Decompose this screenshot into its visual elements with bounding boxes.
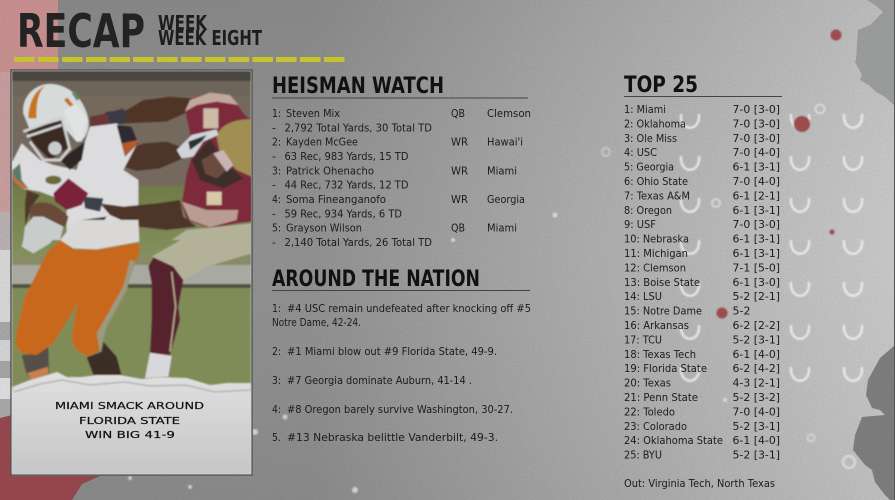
entry 4: Georgia: [487, 194, 525, 206]
Top 25 rankings table: 9: USF: [624, 219, 656, 231]
Top 25 rankings table: 23: Colorado: [624, 421, 687, 433]
Top 25 rankings table: 5-2 [3-2]: [732, 392, 780, 404]
entry 4: -: [272, 208, 276, 220]
Top 25 rankings table: 4-3 [2-1]: [732, 378, 780, 390]
Top 25 rankings table: 8: Oregon: [624, 205, 672, 217]
entry 3: Patrick Ohenacho: [286, 165, 374, 177]
entry 3: WR: [451, 165, 468, 177]
heading: Heisman Watch: HEISMAN WATCH: [272, 74, 444, 99]
Top 25 rankings table: 3: Ole Miss: [624, 133, 677, 145]
Top 25 rankings table: 21: Penn State: [624, 392, 698, 404]
entry 2: [272, 137, 523, 163]
item 1: [272, 303, 531, 329]
Top 25 rankings table: 5-2: [732, 306, 750, 318]
Top 25 rankings table: 24: Oklahoma State: [624, 435, 723, 447]
Top 25 rankings table: 7-1 [5-0]: [732, 262, 780, 274]
photo: football players: [12, 71, 252, 391]
panel: photo card: [11, 70, 252, 475]
Top 25 rankings table: 18: Texas Tech: [624, 349, 696, 361]
entry 1: -: [272, 122, 276, 134]
entry 1: 1:: [272, 108, 281, 120]
item 3: #7 Georgia dominate Auburn, 41-14 .: [287, 375, 472, 387]
Top 25 rankings table: 7: Texas A&M: [624, 190, 690, 202]
entry 2: Kayden McGee: [286, 137, 358, 149]
entry 5: Miami: [487, 223, 517, 235]
subtitle: week eight: WEEK EIGHT: [158, 26, 262, 50]
Top 25 rankings table: 6-1 [3-1]: [732, 234, 780, 246]
entry 3: Miami: [487, 165, 517, 177]
Around the Nation list: [272, 303, 531, 444]
caption line 1: MIAMI SMACK AROUND: [55, 401, 204, 412]
Top 25 rankings table: 6-1 [4-0]: [732, 349, 780, 361]
entry 2: 63 Rec, 983 Yards, 15 TD: [284, 151, 408, 163]
Top 25 rankings table: 5: Georgia: [624, 162, 674, 174]
item 4: 4:: [272, 404, 281, 416]
Top 25 rankings table: 2: Oklahoma: [624, 118, 686, 130]
entry 1: 2,792 Total Yards, 30 Total TD: [284, 122, 432, 134]
entry 2: 2:: [272, 137, 281, 149]
Top 25 rankings table: 7-0 [4-0]: [732, 176, 780, 188]
Top 25 rankings table: 6-1 [2-1]: [732, 190, 780, 202]
entry 4: [272, 194, 525, 220]
entry 5: 2,140 Total Yards, 26 Total TD: [284, 237, 432, 249]
item 2: 2:: [272, 346, 281, 358]
entry 3: -: [272, 180, 276, 192]
entry 4: Soma Fineanganofo: [286, 194, 386, 206]
Top 25 rankings table: 12: Clemson: [624, 262, 686, 274]
entry 1: [272, 108, 531, 134]
subtitle: week: WEEK: [158, 11, 208, 35]
entry 5: -: [272, 237, 276, 249]
caption line 2: FLORIDA STATE: [79, 416, 180, 427]
item 2: #1 Miami blow out #9 Florida State, 49-9.: [287, 346, 497, 358]
Top 25 rankings table: 6-1 [4-0]: [732, 435, 780, 447]
Top 25 rankings table: 13: Boise State: [624, 277, 700, 289]
Top 25 rankings table: 6-2 [2-2]: [732, 320, 780, 332]
Top 25 rankings table: 6: Ohio State: [624, 176, 688, 188]
Top 25 rankings table: 17: TCU: [624, 334, 662, 346]
Top 25 rankings table: 19: Florida State: [624, 363, 707, 375]
torn paper caption area: [12, 372, 251, 474]
Top 25 rankings table: 7-0 [3-0]: [732, 118, 780, 130]
Top 25 rankings table: 5-2 [2-1]: [732, 291, 780, 303]
Top 25 rankings table: 11: Michigan: [624, 248, 688, 260]
item 5: 5.: [272, 432, 281, 444]
Top 25 rankings table: 16: Arkansas: [624, 320, 689, 332]
Top 25 rankings table: 6-1 [3-0]: [732, 277, 780, 289]
entry 1: Steven Mix: [286, 108, 340, 120]
Top 25 rankings table: 4: USC: [624, 147, 657, 159]
entry 4: 59 Rec, 934 Yards, 6 TD: [284, 208, 402, 220]
Top 25 rankings table: 5-2 [3-1]: [732, 450, 780, 462]
entry 5: QB: [451, 223, 465, 235]
entry 2: WR: [451, 137, 468, 149]
entry 1: Clemson: [487, 108, 531, 120]
Top 25 rankings table: 6-1 [3-1]: [732, 162, 780, 174]
Top 25 rankings table: 10: Nebraska: [624, 234, 689, 246]
item 5: #13 Nebraska belittle Vanderbilt, 49-3.: [287, 432, 498, 444]
heading: Top 25: TOP 25: [624, 73, 698, 98]
Top 25 rankings table: 7-0 [4-0]: [732, 406, 780, 418]
entry 3: 3:: [272, 165, 281, 177]
dropped teams note: Out: Virginia Tech, North Texas: [624, 478, 775, 490]
entry 5: 5:: [272, 223, 281, 235]
Top 25 rankings table: 14: LSU: [624, 291, 662, 303]
entry 4: 4:: [272, 194, 281, 206]
Top 25 rankings table: 5-2 [3-1]: [732, 334, 780, 346]
entry 3: 44 Rec, 732 Yards, 12 TD: [284, 180, 408, 192]
dashed yellow divider: [14, 57, 344, 62]
entry 2: -: [272, 151, 276, 163]
entry 4: WR: [451, 194, 468, 206]
Heisman list: [272, 108, 531, 249]
Top 25 rankings table: 5-2 [3-1]: [732, 421, 780, 433]
Top 25 rankings table: 6-1 [3-1]: [732, 205, 780, 217]
Top 25 rankings table: 25: BYU: [624, 450, 662, 462]
entry 5: Grayson Wilson: [286, 223, 362, 235]
item 1: Notre Dame, 42-24.: [272, 317, 361, 329]
item 4: #8 Oregon barely survive Washington, 30-27.: [287, 404, 513, 416]
entry 1: QB: [451, 108, 465, 120]
title: RECAP: RECAP: [17, 4, 145, 58]
Top 25 rankings table: 1: Miami: [624, 104, 666, 116]
Top 25 rankings table: 7-0 [3-0]: [732, 133, 780, 145]
Top 25 rankings table: 7-0 [4-0]: [732, 147, 780, 159]
Top 25 rankings table: 6-1 [3-1]: [732, 248, 780, 260]
caption line 3: WIN BIG 41-9: [85, 430, 175, 441]
item 1: 1:: [272, 303, 281, 315]
item 3: 3:: [272, 375, 281, 387]
Top 25 rankings table: 7-0 [3-0]: [732, 219, 780, 231]
entry 2: Hawai'i: [487, 137, 523, 149]
entry 5: [272, 223, 517, 249]
item 1: #4 USC remain undefeated after knocking off #5: [287, 303, 531, 315]
Top 25 rankings table: 6-2 [4-2]: [732, 363, 780, 375]
Top 25 rankings table: [624, 104, 780, 462]
Top 25 rankings table: 7-0 [3-0]: [732, 104, 780, 116]
Top 25 rankings table: 20: Texas: [624, 378, 671, 390]
heading: Around the Nation: AROUND THE NATION: [272, 267, 480, 292]
Top 25 rankings table: 15: Notre Dame: [624, 306, 702, 318]
entry 3: [272, 165, 517, 192]
Top 25 rankings table: 22: Toledo: [624, 406, 675, 418]
